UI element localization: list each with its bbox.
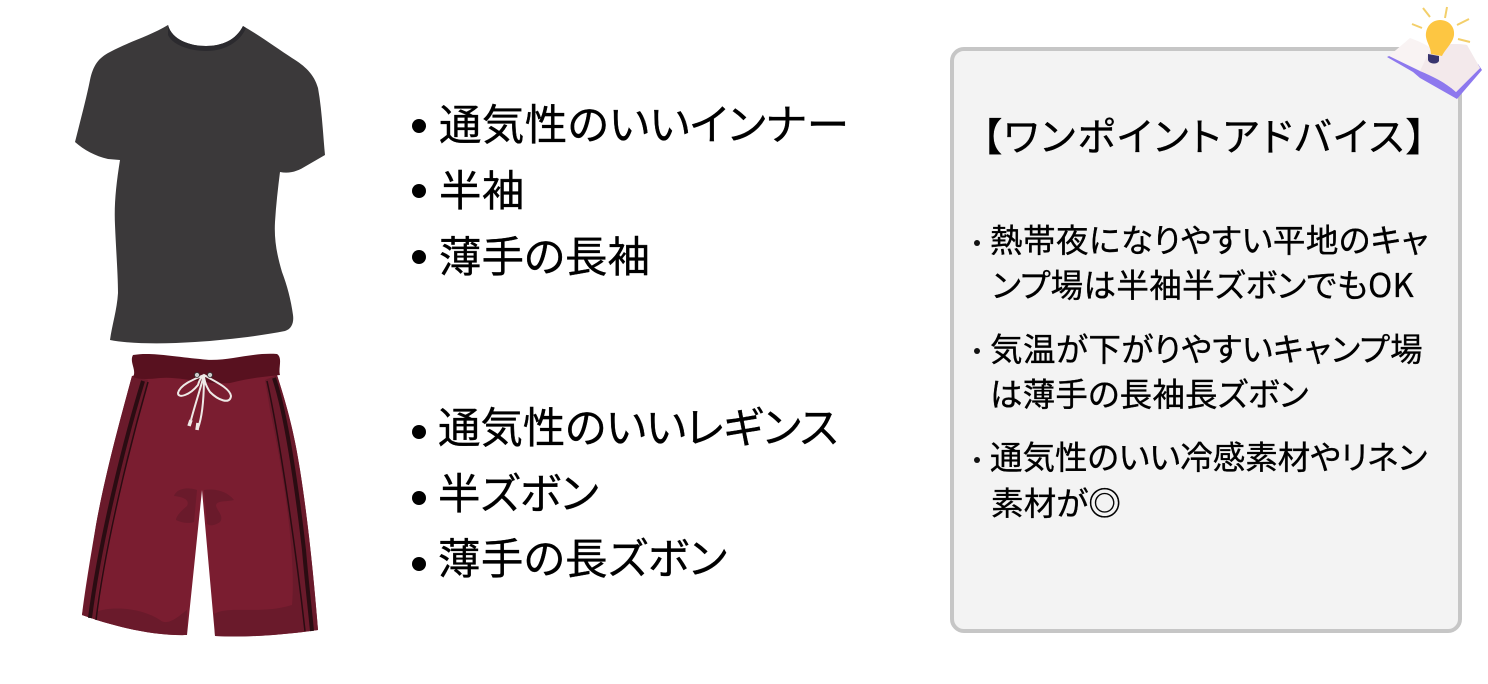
bullet item: shorts: 半ズボン: [438, 461, 599, 522]
advice line: 熱帯夜になりやすい平地のキャ: [990, 215, 1429, 262]
panel heading: 【ワンポイントアドバイス】: [982, 107, 1428, 163]
bullet dot: [974, 240, 980, 246]
bullet item: thin long sleeve: 薄手の長袖: [439, 224, 650, 285]
bullet dot: [412, 250, 426, 264]
bullet dot: [974, 457, 980, 463]
bullet dot: [412, 491, 426, 505]
advice line: ンプ場は半袖半ズボンでもOK: [992, 260, 1414, 307]
advice line: 通気性のいい冷感素材やリネン: [990, 432, 1427, 479]
bullet item: thin long pants: 薄手の長ズボン: [438, 526, 727, 587]
bullet item: leggings: 通気性のいいレギンス: [438, 395, 838, 456]
bullet dot: [412, 119, 426, 133]
bullet dot: [412, 425, 426, 439]
bullet dot: [412, 557, 426, 571]
panel: one-point advice: [950, 47, 1462, 633]
advice line: 気温が下がりやすいキャンプ場: [990, 324, 1423, 371]
bullet dot: [974, 348, 980, 354]
advice line: 素材が◎: [991, 478, 1121, 525]
bullet item: short sleeve: 半袖: [439, 158, 525, 219]
advice line: は薄手の長袖長ズボン: [990, 369, 1309, 416]
bullet item: inner: 通気性のいいインナー: [439, 92, 849, 153]
bullet dot: [412, 184, 426, 198]
